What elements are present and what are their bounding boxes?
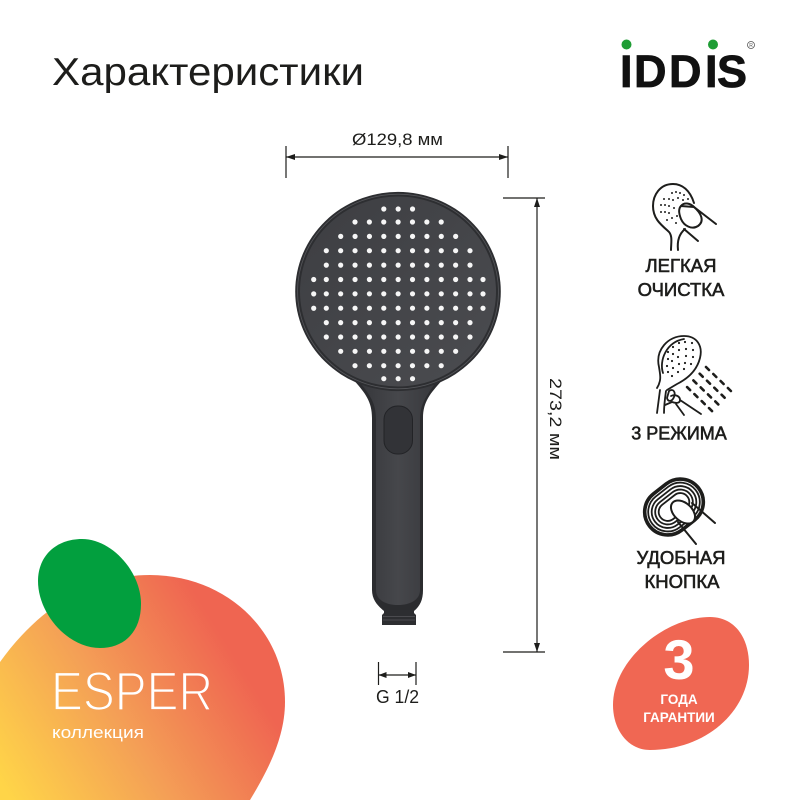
icon: three spray modes — [657, 336, 731, 415]
label: comfortable button: УДОБНАЯ — [636, 547, 726, 568]
warranty badge — [613, 617, 749, 750]
logo: IDDIS: IDDIS — [620, 46, 747, 97]
icon: comfortable button — [635, 470, 715, 544]
label: easy cleaning second line: ОЧИСТКА — [638, 279, 725, 300]
label: easy cleaning: ЛЕГКАЯ — [646, 255, 716, 276]
collection name: ESPER — [51, 660, 213, 722]
warranty badge: 3 — [663, 628, 695, 691]
spray dashes — [687, 367, 731, 411]
spray face — [295, 192, 501, 391]
logo: IDDIS: R — [749, 43, 753, 49]
title: Характеристики — [52, 51, 364, 94]
collection blob — [0, 539, 285, 800]
mode button — [384, 406, 412, 454]
icon: easy cleaning — [653, 184, 716, 250]
label: three modes: 3 РЕЖИМА — [631, 424, 727, 444]
warranty badge: ГОДА — [660, 692, 698, 707]
warranty badge: ГАРАНТИИ — [643, 710, 715, 725]
dimension: head diameter: Ø129,8 мм — [352, 130, 443, 149]
dimension: head diameter — [286, 130, 508, 178]
shower head product — [295, 192, 501, 625]
handle — [352, 378, 444, 611]
dimension: total height — [503, 198, 565, 652]
label: comfortable button second line: КНОПКА — [645, 571, 720, 592]
connector — [382, 610, 416, 625]
green accent — [38, 539, 141, 648]
collection caption: коллекция — [52, 724, 144, 742]
dimension: connector thread — [376, 662, 419, 707]
dimension: connector thread: G 1/2 — [376, 687, 419, 707]
dimension: total height: 273,2 мм — [546, 378, 565, 460]
